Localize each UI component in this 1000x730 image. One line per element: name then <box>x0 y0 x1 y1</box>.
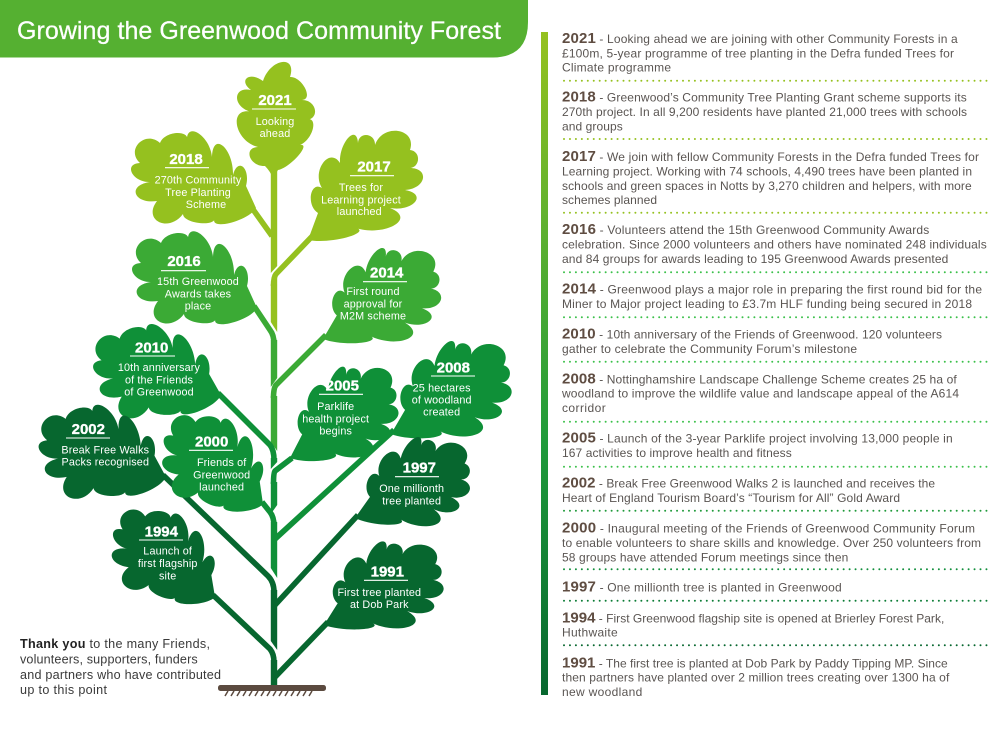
leaf 1994: site <box>159 570 176 582</box>
leaf 2017: 2017 <box>357 159 391 176</box>
leaf 1994: 1994 <box>145 524 179 541</box>
timeline entry 2010: gather to celebrate the Community Forum’s milestone <box>562 342 857 356</box>
leaf 2018: Tree Planting <box>165 187 231 199</box>
timeline entry 2010 <box>562 326 990 362</box>
leaf 2010: 2010 <box>135 339 168 356</box>
timeline entry 1991: 1991 - The first tree is planted at Dob Park by Paddy Tipping MP. Since <box>562 654 948 671</box>
ground and roots <box>218 685 326 696</box>
leaf 2021: ahead <box>260 128 290 140</box>
leaf 2008: 2008 <box>437 359 470 376</box>
leaf 2018: 2018 <box>169 151 203 168</box>
leaf 2018: 270th Community <box>155 174 242 186</box>
timeline entry 2018 <box>562 89 990 139</box>
leaf 2005: Parklife <box>317 401 354 413</box>
leaf 2018: Scheme <box>186 199 226 211</box>
timeline entry 2016 <box>562 221 990 272</box>
timeline entry 2017 <box>562 148 990 213</box>
timeline entry 2021: 2021 - Looking ahead we are joining with other Community Forests in a <box>562 30 958 47</box>
thank you note <box>20 637 221 697</box>
leaf 2010: 10th anniversary <box>118 362 201 374</box>
leaf 1991: First tree planted <box>337 587 421 599</box>
timeline entry 2017: 2017 - We join with fellow Community Forests in the Defra funded Trees for <box>562 148 979 165</box>
timeline entry 2010: 2010 - 10th anniversary of the Friends of Greenwood. 120 volunteers <box>562 326 942 343</box>
timeline entry 2018: and groups <box>562 120 623 134</box>
timeline entry 2008: corridor <box>562 401 606 415</box>
leaf 2016: 2016 <box>167 253 201 270</box>
leaf 2014 <box>323 237 449 359</box>
leaf 2002: Break Free Walks <box>61 444 150 456</box>
timeline entry 2017: schools and green spaces in Notts by 3,270 children and helpers, with more <box>562 179 972 193</box>
leaf 2000: Friends of <box>197 457 247 469</box>
timeline entry 2021: £100m, 5-year programme of tree planting in the Defra funded Trees for <box>562 46 954 60</box>
leaf 2005 <box>290 357 404 473</box>
thank you note: Thank you to the many Friends, <box>20 637 210 651</box>
leaf 1997: One millionth <box>379 483 444 495</box>
timeline entry 1991: new woodland <box>562 685 642 699</box>
leaf 2008: created <box>423 407 460 419</box>
leaf 2014: First round <box>346 286 400 298</box>
leaf 2021: 2021 <box>258 92 292 109</box>
leaf 2017: launched <box>337 206 382 218</box>
leaf 2018 <box>131 131 256 224</box>
leaf 2002 <box>36 400 167 502</box>
leaf 2016: place <box>185 301 211 313</box>
leaf 1994: Launch of <box>143 546 193 558</box>
leaf 2010: of Greenwood <box>124 386 194 398</box>
title banner <box>0 0 528 58</box>
timeline entry 2008 <box>561 371 990 422</box>
thank you note: volunteers, supporters, funders <box>20 652 198 666</box>
leaf 2008: of woodland <box>412 394 472 406</box>
leaf 2002: 2002 <box>72 421 105 438</box>
timeline entry 2021 <box>562 30 990 81</box>
thank you note: up to this point <box>20 683 108 697</box>
leaf 2000: Greenwood <box>193 469 250 481</box>
timeline entry 2014 <box>562 280 990 317</box>
leaf 2021 <box>237 62 315 178</box>
leaf 1991: 1991 <box>371 564 404 581</box>
timeline entry 1994: Huthwaite <box>562 626 618 640</box>
timeline entry 2014: Miner to Major project leading to £3.7m HLF funding being secured in 2018 <box>562 297 972 311</box>
leaf 1997: tree planted <box>382 495 441 507</box>
timeline entry 2008: 2008 - Nottinghamshire Landscape Challenge Scheme creates 25 ha of <box>562 371 957 388</box>
timeline entry 2000: to enable volunteers to share skills and knowledge. Over 250 volunteers from <box>562 536 981 550</box>
leaf 2005: begins <box>319 426 353 438</box>
timeline entry 2008: woodland to improve the wildlife value and landscape appeal of the A614 <box>561 387 959 401</box>
leaf 2017: Learning project <box>321 194 401 206</box>
leaf 2014: approval for <box>344 298 403 310</box>
leaf 2010: of the Friends <box>125 374 194 386</box>
leaf 2000: launched <box>199 482 244 494</box>
timeline entry 2000 <box>562 520 990 569</box>
timeline entry 2014: 2014 - Greenwood plays a major role in preparing the first round bid for the <box>562 280 982 297</box>
leaf 2008 <box>391 330 519 454</box>
thank you note: and partners who have contributed <box>20 668 221 682</box>
leaf 2021: Looking <box>256 116 294 128</box>
title banner: Growing the Greenwood Community Forest <box>17 17 501 45</box>
timeline bar <box>541 32 548 695</box>
timeline entry 2017: Learning project. Working with 74 schools, 4,490 trees have been planted in <box>562 165 972 179</box>
timeline entry 2002: Heart of England Tourism Board’s “Tourism for All” Gold Award <box>562 491 900 505</box>
leaf 1994: first flagship <box>138 558 198 570</box>
timeline entry 2005 <box>562 430 990 467</box>
leaf 2017 <box>308 131 423 241</box>
timeline entry 2005: 167 activities to improve health and fitness <box>562 446 792 460</box>
timeline entry 1994 <box>562 609 990 645</box>
leaf 2000 <box>150 404 282 519</box>
leaf 2002: Packs recognised <box>61 456 149 468</box>
timeline entry 2016: celebration. Since 2000 volunteers and others have nominated 248 individuals <box>562 238 987 252</box>
leaf 2014: M2M scheme <box>340 310 406 322</box>
timeline entry 2018: 270th project. In all 9,200 residents have planted 21,000 trees with schools <box>562 105 967 119</box>
leaf 2010 <box>90 319 222 422</box>
leaf 2008: 25 hectares <box>413 382 471 394</box>
leaf 1991 <box>324 530 451 645</box>
leaf 2016: 15th Greenwood <box>157 276 239 288</box>
tree trunk and branches <box>163 170 394 686</box>
leaf 1991: at Dob Park <box>350 599 409 611</box>
timeline entry 2002: 2002 - Break Free Greenwood Walks 2 is launched and receives the <box>562 474 935 491</box>
timeline entry 1991 <box>562 654 950 699</box>
timeline entry 2005: 2005 - Launch of the 3-year Parklife project involving 13,000 people in <box>562 430 953 447</box>
leaf 2014: 2014 <box>370 264 404 281</box>
timeline entry 1991: then partners have planted over 2 million trees creating over 1300 ha of <box>562 671 950 685</box>
timeline entry 1997: 1997 - One millionth tree is planted in Greenwood <box>562 579 842 596</box>
leaf 2005: 2005 <box>326 378 359 395</box>
leaf 2000: 2000 <box>195 434 228 451</box>
leaf 1994 <box>100 499 233 611</box>
leaf 2017: Trees for <box>339 182 383 194</box>
leaf 1997: 1997 <box>403 460 436 477</box>
timeline entry 2017: schemes planned <box>562 193 657 207</box>
timeline entry 2000: 58 groups have attended Forum meetings since then <box>562 550 848 564</box>
timeline entry 2021: Climate programme <box>562 61 671 75</box>
leaf 2016 <box>132 231 257 324</box>
leaf 1997 <box>355 423 480 546</box>
timeline entry 2002 <box>562 474 990 511</box>
leaf 2005: health project <box>302 414 369 426</box>
timeline entry 1994: 1994 - First Greenwood flagship site is opened at Brierley Forest Park, <box>562 609 944 626</box>
leaf 2016: Awards takes <box>165 288 232 300</box>
timeline entry 2018: 2018 - Greenwood’s Community Tree Planting Grant scheme supports its <box>562 89 967 106</box>
timeline entry 2016: 2016 - Volunteers attend the 15th Greenwood Community Awards <box>562 221 929 238</box>
timeline entry 2000: 2000 - Inaugural meeting of the Friends of Greenwood Community Forum <box>562 520 975 537</box>
timeline entry 2016: and 84 groups for awards leading to 195 Greenwood Awards presented <box>562 252 948 266</box>
